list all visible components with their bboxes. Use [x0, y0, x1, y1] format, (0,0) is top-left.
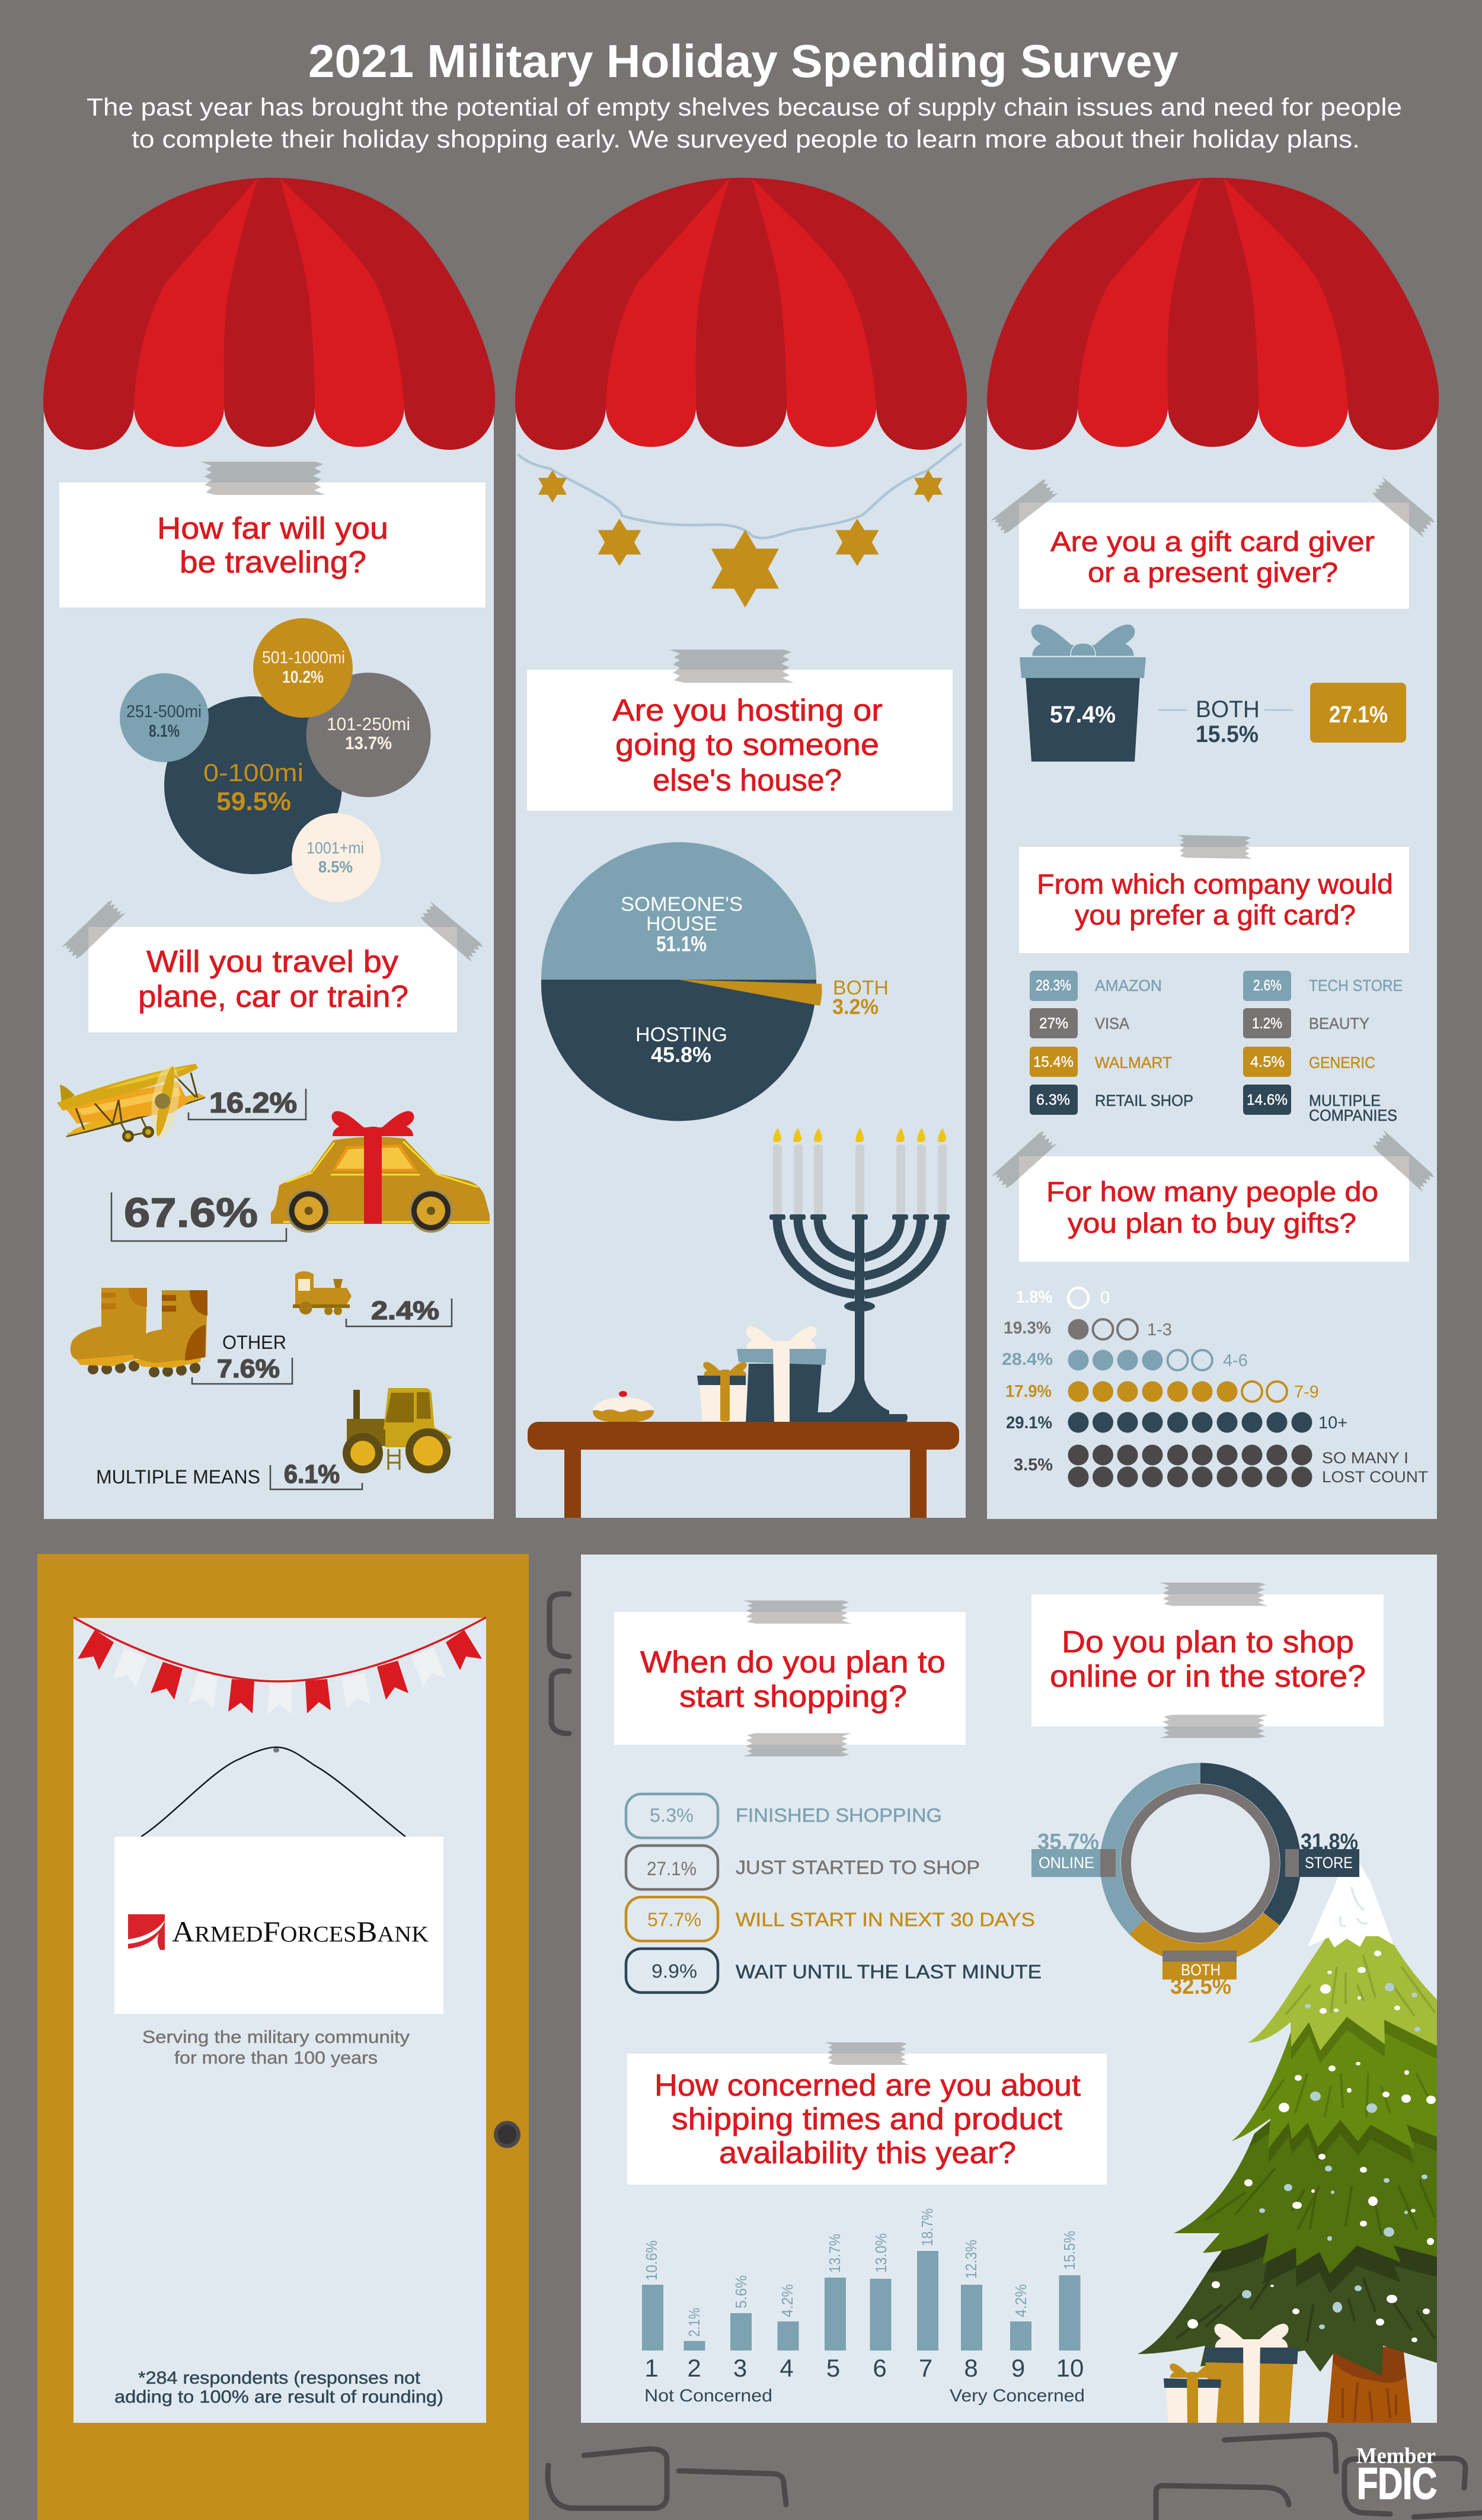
value: plane [189, 1088, 306, 1120]
icon: boots [71, 1288, 207, 1377]
value: multiple means: MULTIPLE MEANS [96, 1466, 260, 1488]
icon: plane [57, 1063, 205, 1142]
list: when shopping starts: 27.1% [647, 1858, 697, 1879]
list: when shopping starts: FINISHED SHOPPING [736, 1805, 942, 1826]
pie chart: hosting: 45.8% [651, 1042, 711, 1067]
legend: companies: VISA [1095, 1015, 1129, 1032]
heading: hosting [527, 650, 953, 811]
label: online: ONLINE [1039, 1854, 1094, 1872]
sign: bank logo: ARMEDFORCESBANK [172, 1915, 429, 1948]
bubble chart: distance: 0-100mi [203, 759, 304, 786]
heading: travel by: Will you travel by [146, 945, 398, 979]
legend: companies: TECH STORE [1309, 977, 1403, 994]
bar chart: concern: 8 [964, 2354, 978, 2382]
legend: companies: RETAIL SHOP [1095, 1092, 1193, 1109]
bar chart: concern: 3 [733, 2354, 747, 2382]
legend: companies [1030, 971, 1403, 1124]
heading: travel by: plane, car or train? [138, 980, 408, 1014]
bar chart: concern: 10.6% [643, 2240, 660, 2281]
legend: companies: GENERIC [1309, 1054, 1375, 1072]
bar chart: concern: 15.5% [1061, 2231, 1078, 2270]
list: when shopping starts: 57.7% [647, 1909, 701, 1930]
heading: which company: From which company would [1037, 868, 1393, 900]
heading: how concerned: How concerned are you about [654, 2068, 1081, 2103]
bar chart: concern: 5.6% [732, 2275, 750, 2308]
logo: member fdic: FDIC [1357, 2459, 1437, 2508]
dot chart: recipients: 19.3% [1004, 1319, 1051, 1338]
bar chart: concern: 4.2% [1012, 2284, 1030, 2317]
pie chart: hosting: 51.1% [656, 932, 707, 956]
icon: menorah [769, 1128, 950, 1422]
heading: how concerned: shipping times and product [672, 2102, 1063, 2137]
bar chart: concern: Not Concerned [644, 2386, 772, 2406]
dot chart: recipients: 1-3 [1147, 1320, 1172, 1339]
bar chart: concern: 7 [919, 2354, 932, 2382]
icon: donut [593, 1391, 654, 1422]
legend: companies: 1.2% [1252, 1015, 1282, 1032]
icon: train [293, 1271, 352, 1315]
tagline [142, 2027, 410, 2068]
dot chart: recipients: 1.8% [1016, 1288, 1052, 1307]
icon: table [528, 1422, 959, 1518]
pie chart: hosting: 3.2% [832, 994, 879, 1019]
heading: when shopping: When do you plan to [640, 1645, 946, 1680]
list: when shopping starts: WILL START IN NEXT 30 DAYS [736, 1909, 1035, 1930]
bar chart: concern: 2.1% [685, 2308, 703, 2337]
icon: tree gift large [1205, 2324, 1298, 2423]
bubble chart: distance: 101-250mi [327, 714, 410, 734]
bar chart: concern: 6 [873, 2354, 887, 2382]
comparison: present vs gift card [1020, 625, 1406, 762]
comparison: present vs gift card: 15.5% [1196, 721, 1259, 747]
bar chart: concern: 4.2% [778, 2284, 796, 2317]
heading: how far: be traveling? [180, 545, 366, 580]
dot chart: recipients: 7-9 [1294, 1383, 1319, 1402]
heading: gift card giver: or a present giver? [1088, 557, 1338, 588]
heading: how far [59, 462, 486, 607]
bar chart: concern: 18.7% [918, 2208, 936, 2246]
value: multiple means: 6.1% [284, 1460, 340, 1489]
heading: hosting: going to someone [615, 728, 879, 762]
icon: bank logo mark [128, 1914, 165, 1950]
footnote: *284 respondents (responses not [138, 2368, 421, 2388]
value: car [111, 1189, 286, 1241]
icon: car [271, 1111, 490, 1233]
heading: online or store: Do you plan to shop [1062, 1625, 1354, 1659]
legend: companies: 6.3% [1036, 1092, 1070, 1108]
bubble chart: distance: 13.7% [345, 733, 392, 753]
bar chart: concern: 13.0% [872, 2233, 890, 2273]
value: car: 67.6% [124, 1189, 258, 1236]
value: other: OTHER [222, 1332, 286, 1353]
bar chart: concern [642, 2208, 1085, 2406]
bar chart: concern: 10 [1056, 2354, 1084, 2382]
heading: hosting: else's house? [653, 763, 842, 798]
decoration: bunting [74, 1617, 486, 1715]
heading: travel by [61, 898, 485, 1032]
legend: companies: 14.6% [1247, 1092, 1288, 1108]
heading: gift card giver [990, 477, 1437, 609]
legend: companies: COMPANIES [1309, 1107, 1397, 1124]
bubble chart: distance: 1001+mi [306, 839, 364, 857]
pie chart: hosting: SOMEONE'S [621, 893, 743, 916]
bubble chart: distance: 8.5% [318, 858, 353, 876]
legend: companies: WALMART [1095, 1054, 1172, 1072]
dot chart: recipients: 28.4% [1002, 1350, 1053, 1369]
list: when shopping starts: WAIT UNTIL THE LAST MINUTE [736, 1961, 1042, 1982]
intro text [87, 93, 1402, 153]
bar chart: concern: 1 [644, 2354, 659, 2382]
decoration: brush strokes [548, 1594, 1482, 2520]
heading: how many people: you plan to buy gifts? [1068, 1207, 1356, 1239]
legend: companies: 28.3% [1036, 977, 1071, 994]
dot chart: recipients: 0 [1100, 1288, 1110, 1307]
heading: which company: you prefer a gift card? [1075, 899, 1356, 930]
bubble chart: distance: 59.5% [216, 787, 291, 816]
dot chart: recipients: 3.5% [1014, 1456, 1053, 1475]
intro text: The past year has brought the potential of empty shelves because of supply chain issues and need for people [87, 93, 1402, 121]
panel: shopping [581, 1555, 1446, 2424]
comparison: present vs gift card: 57.4% [1050, 702, 1116, 728]
heading: online or store [1031, 1582, 1384, 1738]
icon: awning [987, 178, 1439, 450]
bar chart: concern: 12.3% [962, 2240, 980, 2279]
bar chart: concern: 4 [780, 2354, 794, 2382]
label: online [1031, 1830, 1116, 1877]
icon: door knob [494, 2121, 520, 2148]
icon: awning [43, 178, 495, 450]
bubble chart: distance: 251-500mi [126, 702, 202, 721]
dot chart: recipients: 17.9% [1005, 1382, 1052, 1401]
dot chart: recipients: 29.1% [1006, 1413, 1052, 1432]
pie chart: hosting: BOTH [833, 977, 889, 999]
list: when shopping starts: 5.3% [650, 1805, 694, 1826]
hanging wire [141, 1747, 405, 1837]
list: when shopping starts [626, 1794, 1042, 1993]
list: when shopping starts: 9.9% [651, 1961, 697, 1982]
logo: member fdic: Member [1356, 2444, 1436, 2468]
heading: gift card giver: Are you a gift card giver [1050, 526, 1375, 557]
heading: how far: How far will you [157, 511, 388, 546]
value: plane: 16.2% [209, 1088, 297, 1119]
donut chart: online vs store [1031, 1773, 1359, 1999]
legend: companies: BEAUTY [1309, 1015, 1369, 1032]
list: when shopping starts: JUST STARTED TO SHOP [736, 1857, 980, 1878]
label: store [1285, 1830, 1359, 1877]
heading: how many people: For how many people do [1046, 1176, 1378, 1207]
pie chart: hosting: HOUSE [646, 913, 717, 935]
footnote [114, 2368, 443, 2407]
icon: tree gift small [1164, 2364, 1221, 2423]
sign: bank logo [114, 1837, 443, 2014]
pie chart: hosting: HOSTING [635, 1024, 727, 1046]
heading: how concerned [627, 2042, 1107, 2185]
icon: small gift [697, 1362, 750, 1421]
heading: how concerned: availability this year? [719, 2136, 1016, 2170]
label: both: 32.5% [1170, 1974, 1231, 1999]
icon: awning [515, 178, 967, 450]
title: 2021 Military Holiday Spending Survey [308, 35, 1178, 87]
icon: gift box [1020, 625, 1146, 762]
value: train: 2.4% [371, 1296, 439, 1325]
panel: gifts [987, 178, 1439, 1519]
heading: which company [1019, 835, 1409, 953]
icon: christmas tree [1138, 1855, 1446, 2424]
dot chart: recipients: 4-6 [1223, 1351, 1248, 1370]
legend: companies: MULTIPLE [1309, 1092, 1381, 1109]
comparison: present vs gift card: BOTH [1196, 696, 1260, 722]
icon: tractor [343, 1388, 452, 1473]
label: store: 31.8% [1301, 1830, 1358, 1854]
label: both [1162, 1950, 1237, 1999]
label: online: 35.7% [1037, 1830, 1099, 1854]
tagline: Serving the military community [142, 2027, 410, 2047]
panel: hosting [515, 178, 967, 1518]
dot chart: recipients [1002, 1288, 1428, 1488]
bubble chart: distance: 10.2% [282, 668, 324, 687]
panel: door [37, 1554, 529, 2520]
footnote: adding to 100% are result of rounding) [114, 2387, 443, 2407]
legend: companies: 4.5% [1250, 1054, 1285, 1070]
intro text: to complete their holiday shopping early. We surveyed people to learn more about their holiday plans. [132, 125, 1360, 153]
heading: when shopping: start shopping? [679, 1680, 907, 1714]
bar chart: concern: 13.7% [826, 2234, 844, 2273]
heading: online or store: online or in the store? [1050, 1659, 1366, 1694]
legend: companies: 2.6% [1253, 977, 1282, 994]
heading: when shopping [614, 1600, 966, 1757]
legend: companies: 15.4% [1033, 1054, 1074, 1070]
value: multiple means [96, 1460, 362, 1489]
legend: companies: 27% [1039, 1015, 1068, 1032]
label: both: BOTH [1181, 1961, 1221, 1979]
bubble chart: distance: 8.1% [149, 722, 180, 741]
value: other [192, 1332, 292, 1384]
bubble chart: distance [120, 618, 430, 902]
icon: large gift [737, 1326, 826, 1424]
bubble chart: distance: 501-1000mi [262, 648, 345, 667]
logo: member fdic [1356, 2444, 1437, 2508]
decoration: star garland [519, 444, 961, 607]
tagline: for more than 100 years [174, 2048, 378, 2068]
legend: companies: AMAZON [1095, 977, 1162, 994]
label: store: STORE [1305, 1854, 1353, 1872]
heading: how many people [991, 1129, 1436, 1262]
dot chart: recipients: 10+ [1318, 1413, 1347, 1432]
bar chart: concern: 2 [687, 2354, 701, 2382]
bar chart: concern: Very Concerned [950, 2386, 1085, 2406]
value: other: 7.6% [217, 1354, 280, 1383]
bar chart: concern: 9 [1011, 2354, 1025, 2382]
comparison: present vs gift card: 27.1% [1329, 702, 1388, 728]
dot chart: recipients: SO MANY I [1322, 1449, 1408, 1467]
dot chart: recipients: LOST COUNT [1322, 1468, 1428, 1486]
pie chart: hosting [541, 842, 889, 1121]
heading: hosting: Are you hosting or [612, 693, 883, 728]
value: train [346, 1296, 452, 1326]
panel: travel [43, 178, 495, 1519]
bar chart: concern: 5 [826, 2354, 840, 2382]
